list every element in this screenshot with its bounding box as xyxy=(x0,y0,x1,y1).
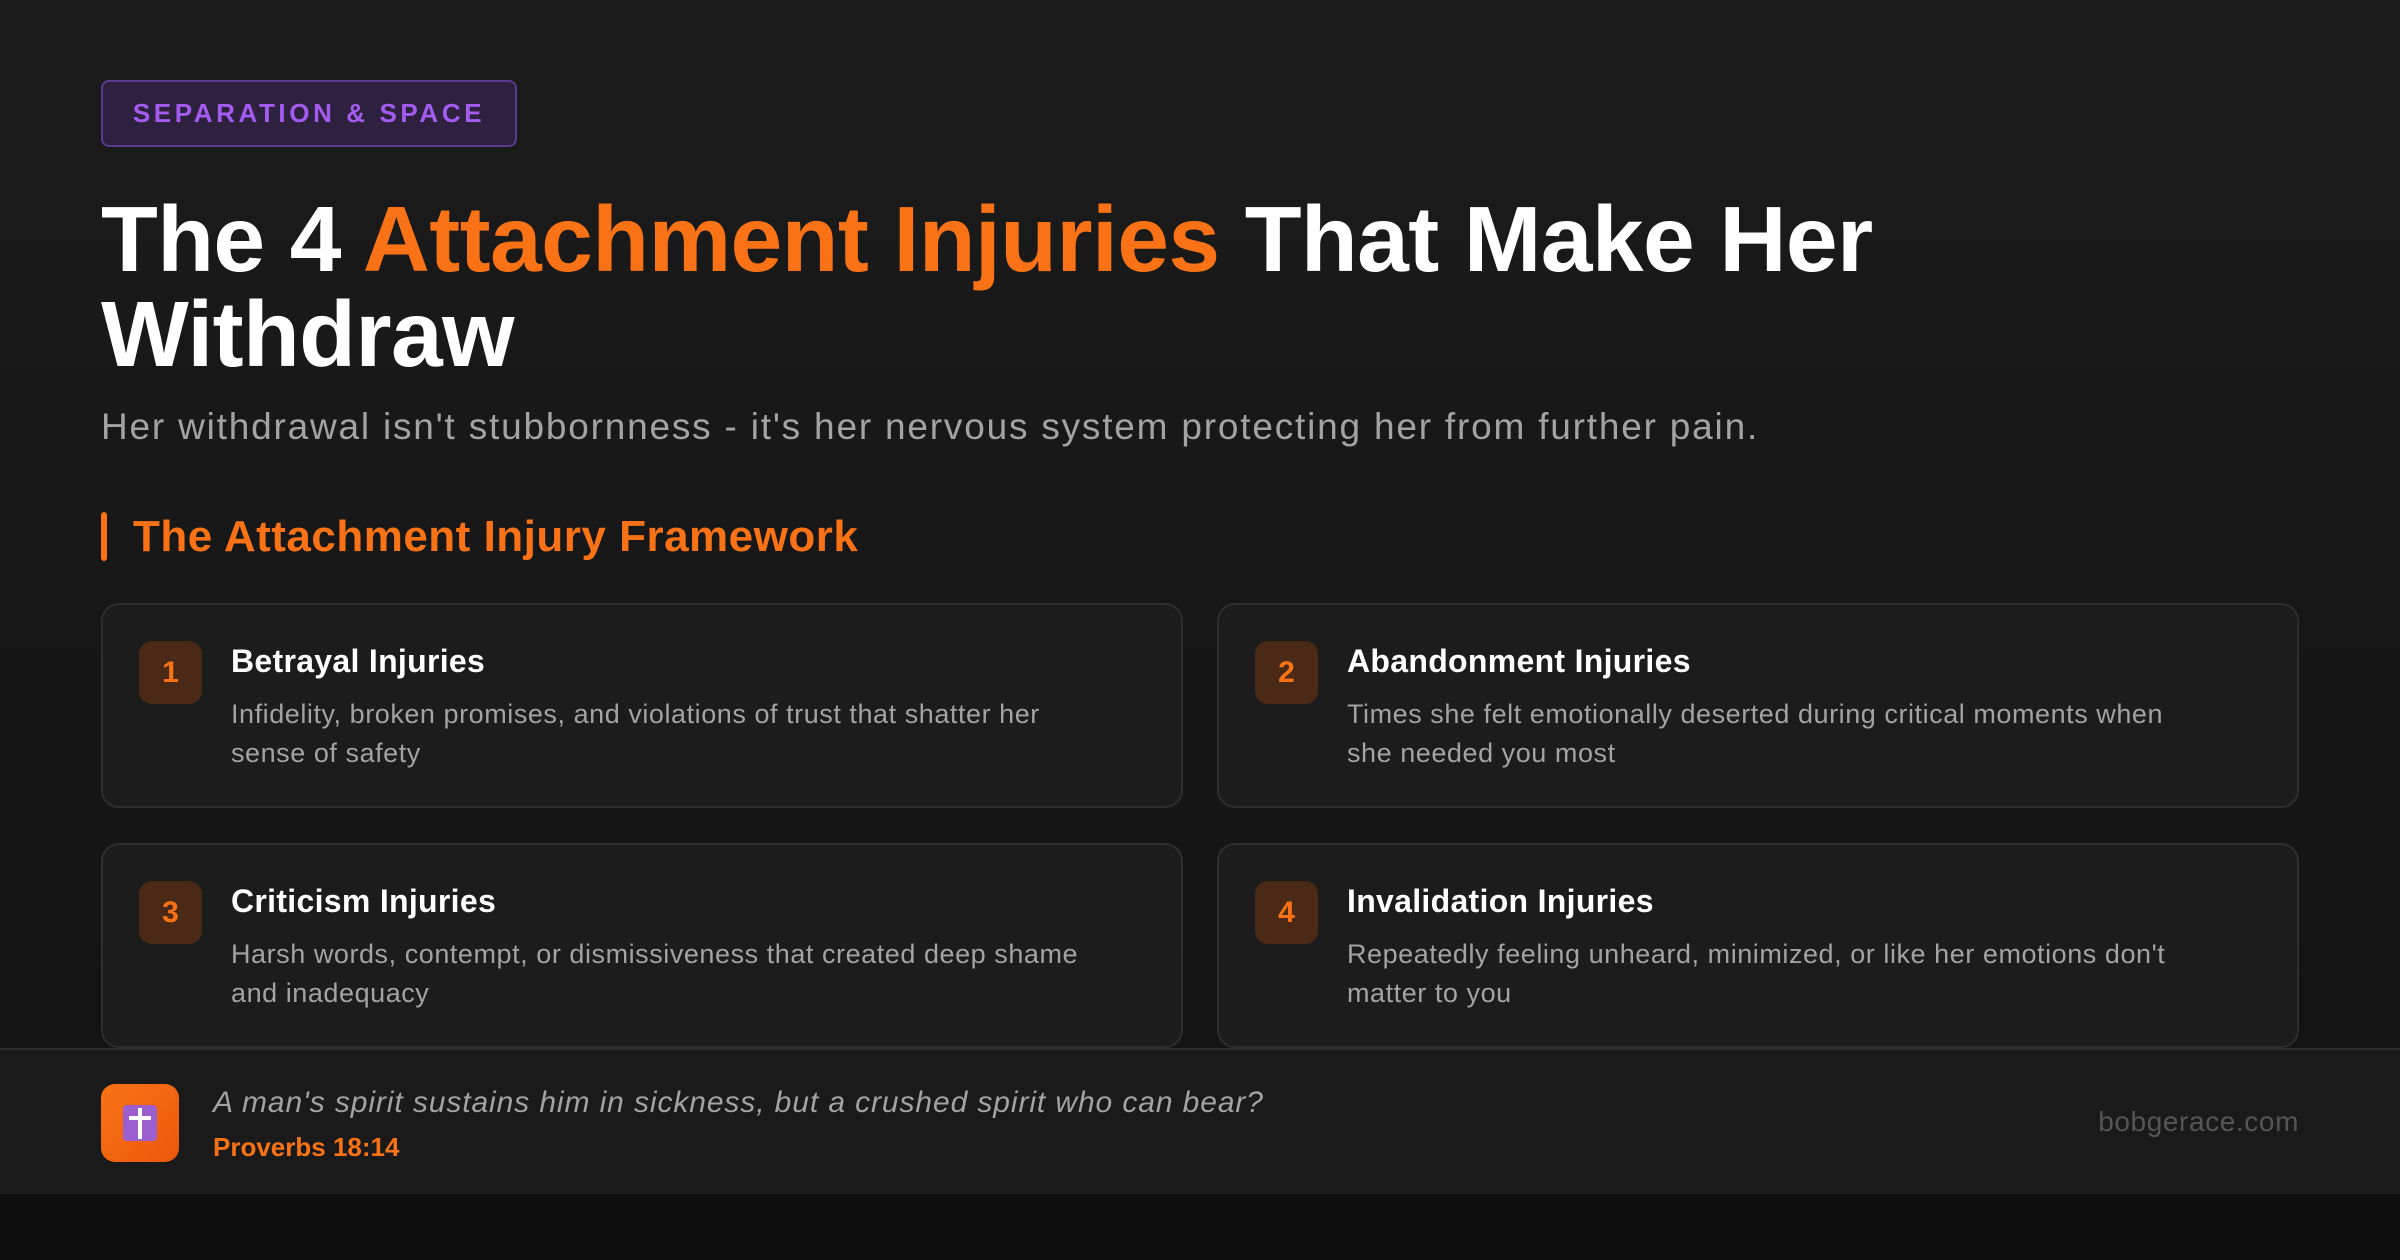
number 3 xyxy=(139,881,202,944)
card description: Repeatedly feeling unheard, minimized, or like her emotions don't matter to you xyxy=(1347,939,2165,1008)
site: bobgerace.com xyxy=(2098,1106,2299,1137)
card title: Betrayal Injuries xyxy=(231,643,485,679)
reference: Proverbs 18:14 xyxy=(213,1132,399,1162)
card description: Infidelity, broken promises, and violations of trust that shatter her sense of safety xyxy=(231,699,1040,768)
quote: A man's spirit sustains him in sickness, but a crushed spirit who can bear? xyxy=(213,1086,1264,1119)
card title: Invalidation Injuries xyxy=(1347,883,1654,919)
card description: Harsh words, contempt, or dismissiveness that created deep shame and inadequacy xyxy=(231,939,1078,1008)
card: invalidation xyxy=(1217,843,2299,1048)
icon: cross xyxy=(101,1084,179,1162)
number 2: 2 xyxy=(1278,656,1295,688)
number 1 xyxy=(139,641,202,704)
number 2 xyxy=(1255,641,1318,704)
number 1: 1 xyxy=(162,656,179,688)
footer xyxy=(0,1048,2400,1194)
card description: Times she felt emotionally deserted during critical moments when she needed you most xyxy=(1347,699,2163,768)
number 4 xyxy=(1255,881,1318,944)
number 4: 4 xyxy=(1278,896,1295,928)
subtitle: Her withdrawal isn't stubbornness - it's her nervous system protecting her from further pain. xyxy=(101,406,1759,447)
card: abandonment xyxy=(1217,603,2299,808)
title: The 4 Attachment Injuries That Make Her Withdraw xyxy=(101,187,1873,386)
card title: Abandonment Injuries xyxy=(1347,643,1691,679)
badge: SEPARATION & SPACE xyxy=(133,98,485,128)
badge xyxy=(101,80,517,147)
card: criticism xyxy=(101,843,1183,1048)
section heading: The Attachment Injury Framework xyxy=(133,512,858,561)
card title: Criticism Injuries xyxy=(231,883,496,919)
card: betrayal xyxy=(101,603,1183,808)
number 3: 3 xyxy=(162,896,179,928)
